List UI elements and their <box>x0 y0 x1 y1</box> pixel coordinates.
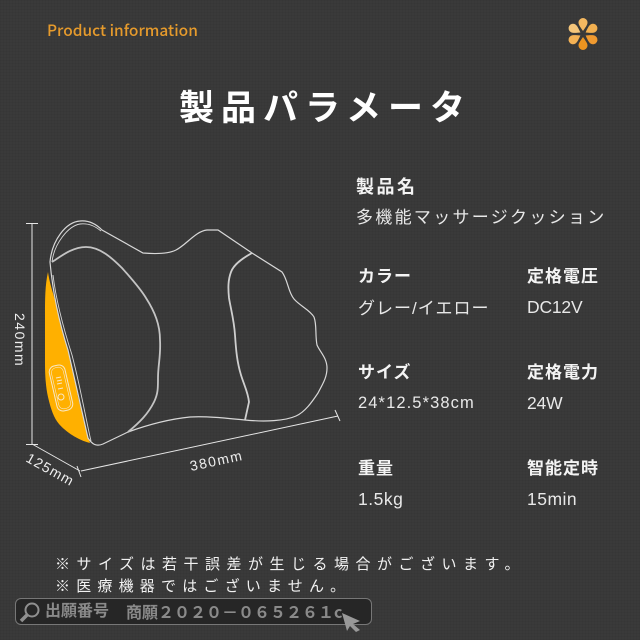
note: not a medical device: ※医療機器ではございません。 <box>55 578 351 595</box>
orange side panel <box>45 272 90 443</box>
search bar: trademark application number <box>15 598 372 625</box>
spec: rated voltage value: DC12V <box>527 297 582 317</box>
dimension: height <box>26 223 38 444</box>
application label: 出願番号 <box>45 603 109 620</box>
spec: timer heading: 智能定時 <box>527 459 599 478</box>
cushion outline <box>50 221 327 445</box>
label: 125mm: 125mm <box>24 450 77 489</box>
spec: rated power value: 24W <box>527 393 562 413</box>
spec: weight value: 1.5kg <box>358 489 403 509</box>
left cushion panel seam <box>52 247 160 432</box>
spec: timer value: 15min <box>527 489 577 509</box>
spec: rated power heading: 定格電力 <box>527 363 599 382</box>
product name heading: 製品名 <box>356 177 418 197</box>
right cushion panel seam <box>228 253 252 420</box>
spec: color value: グレー/イエロー <box>358 299 490 318</box>
label: 240mm: 240mm <box>12 313 28 367</box>
header label: Product information <box>47 19 198 41</box>
spec: size value: 24*12.5*38cm <box>358 394 475 412</box>
label: 380mm: 380mm <box>188 447 245 474</box>
spec: weight heading: 重量 <box>358 459 394 478</box>
icon: orange flower <box>568 18 598 50</box>
dimension: depth and width <box>32 410 340 477</box>
product name value: 多機能マッサージクッション <box>356 208 607 227</box>
spec: size heading: サイズ <box>358 363 412 382</box>
note: size tolerance: ※サイズは若干誤差が生じる場合がございます。 <box>55 556 526 573</box>
application number: 商願２０２０－０６５２６１c <box>126 599 342 623</box>
control panel icon <box>48 364 74 412</box>
title: 製品パラメータ <box>179 89 472 128</box>
spec: color heading: カラー <box>358 267 412 286</box>
spec: rated voltage heading: 定格電圧 <box>527 267 599 286</box>
